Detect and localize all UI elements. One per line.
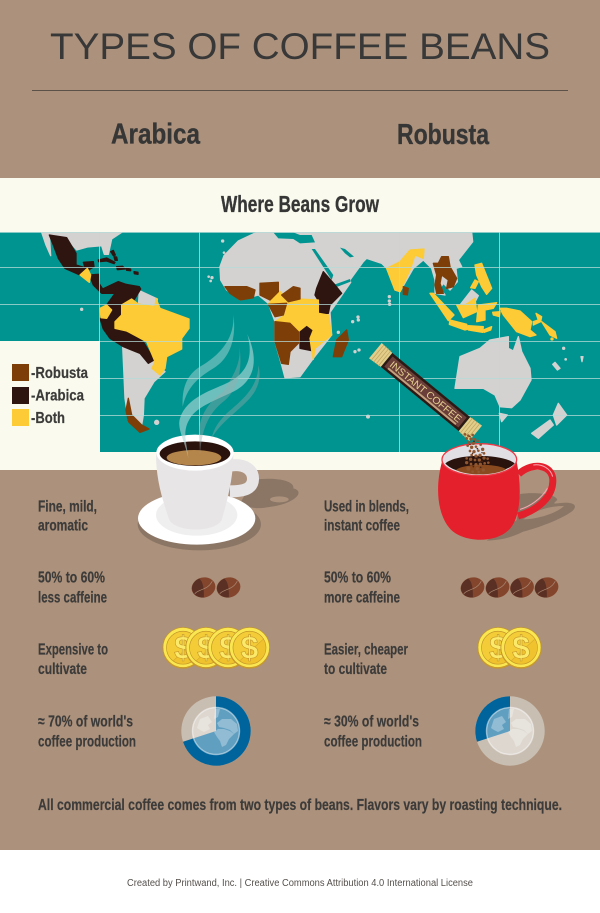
brown lower panel (0, 470, 600, 850)
icon: two coins (478, 627, 541, 668)
icon: two coins: $ (512, 630, 530, 666)
text: 70 percent of production: ≈ 70% of world's (38, 714, 133, 730)
heading: Arabica: Arabica (111, 118, 201, 150)
text: used in blends, instant coffee: instant coffee (324, 518, 400, 534)
text: less caffeine: less caffeine (38, 590, 107, 606)
text: easier, cheaper to cultivate: to cultivate (324, 661, 387, 678)
world map (0, 232, 600, 452)
body (438, 462, 520, 540)
red coffee cup (438, 433, 575, 541)
text: used in blends, instant coffee: Used in blends, (324, 498, 409, 516)
legend (12, 364, 88, 427)
cup shadow (487, 493, 575, 541)
text: expensive to cultivate: cultivate (38, 661, 87, 678)
title rule (32, 90, 568, 91)
text: 30 percent of production: ≈ 30% of world's (324, 714, 419, 730)
icon: four coins (163, 627, 270, 668)
instant coffee sachet (369, 343, 482, 441)
pie: 30 percent (475, 696, 545, 766)
pie: 70 percent (181, 696, 251, 766)
text: easier, cheaper to cultivate: Easier, cheaper (324, 642, 408, 658)
instant coffee sachet: INSTANT COFFEE (387, 360, 464, 425)
icon: four coins: $ (197, 630, 215, 666)
robusta regions (126, 257, 457, 432)
footer band (0, 850, 600, 913)
heading: Where Beans Grow: Where Beans Grow (221, 191, 379, 217)
coffee granules (464, 433, 490, 473)
handle (518, 465, 553, 516)
text: more caffeine: 50% to 60% (324, 570, 391, 586)
grey land masses (42, 232, 583, 438)
legend: arabica: -Arabica (31, 388, 84, 404)
cup body (156, 453, 233, 529)
icon: two beans (189, 575, 243, 600)
white coffee cup (138, 435, 299, 550)
panel: cream map band (0, 178, 600, 470)
text: 70 percent of production: coffee production (38, 734, 136, 750)
text: fine, mild, aromatic: Fine, mild, (38, 498, 97, 516)
map grid lines (0, 232, 600, 452)
text: fine, mild, aromatic: aromatic (38, 518, 88, 534)
legend: robusta: -Robusta (31, 365, 88, 382)
title: TYPES OF COFFEE BEANS (50, 25, 550, 67)
both regions (80, 249, 557, 375)
heading: Robusta: Robusta (397, 119, 490, 151)
arabica regions (49, 235, 342, 363)
text: less caffeine: 50% to 60% (38, 570, 105, 586)
icon: four coins: $ (219, 630, 237, 666)
seas cut into land (273, 232, 354, 287)
steam (179, 314, 260, 458)
icon: four beans (458, 575, 561, 600)
saucer (138, 492, 261, 550)
icon: four coins: $ (241, 630, 259, 666)
icon: two coins: $ (489, 630, 507, 666)
text: expensive to cultivate: Expensive to (38, 642, 108, 658)
text: 30 percent of production: coffee production (324, 734, 422, 750)
handle shadow (240, 479, 299, 508)
legend: both: -Both (31, 410, 65, 427)
icon: four coins: $ (174, 630, 192, 666)
text: more caffeine: more caffeine (324, 590, 400, 606)
footer credit: Created by Printwand, Inc. | Creative Commons Attribution 4.0 International License (127, 878, 473, 889)
cup handle (230, 465, 253, 491)
